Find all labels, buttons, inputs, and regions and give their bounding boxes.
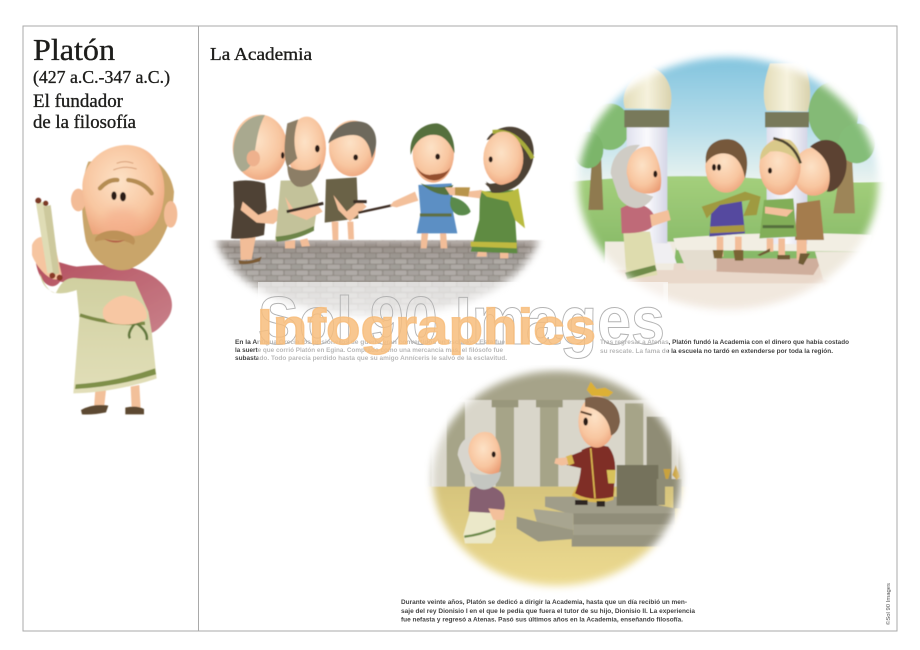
left column [624,67,677,263]
palace wall [428,366,686,487]
section heading: La Academia [210,44,312,64]
scene 2: founding of the Academy [570,50,890,320]
cobblestone floor [210,240,550,320]
student in green [757,138,801,259]
old Plato [611,145,671,280]
scene 1: Plato sold into slavery [210,115,550,320]
slave trader in blue [390,123,471,248]
slave 3 [325,120,393,240]
caption 2: Tras regresar a Atenas, Platón fundó la Academia con el dinero que había costado [600,340,849,346]
title: Platón: Platón [33,32,116,67]
copyright credit: ©Sol 90 Images [885,583,892,625]
sky [570,50,890,182]
caption 1 [235,340,507,362]
illustration: Plato portrait [32,145,177,414]
watermark: Infographics: Infographics [257,299,596,355]
sidebar title block [33,32,170,133]
subtitle line 2: de la filosofía [33,113,136,133]
caption 3: saje del rey Dionisio I en el que le pedía que fuera el tutor de su hijo, Dionisio II. La experiencia [401,609,696,615]
caption 3: fue nefasta y regresó a Atenas. Pasó sus últimos años en la Academia, enseñando filosofía. [401,618,683,624]
caption 1: subastado. Todo parecía perdido hasta que su amigo Anníceris le salvó de la esclavitud. [235,356,507,362]
right column [764,63,810,244]
grass [570,176,890,263]
palace columns [447,400,672,492]
caption 2: su rescate. La fama de la escuela no tardó en extenderse por toda la región. [600,349,833,355]
watermark fade panel [258,282,668,365]
caption 2 [600,340,849,355]
trees [573,82,875,213]
student in purple [702,139,761,261]
caption 1: la suerte que corrió Platón en Egina. Comprado como una mercancía más, el filósofo fue [235,348,504,354]
scene 3: Plato and Dionysius [425,365,690,595]
slave 1 [231,115,287,264]
watermark: Sol 90 Images outline: Sol 90 Images [258,283,665,359]
subtitle line 1: El fundador [33,92,123,112]
entablature [475,368,642,400]
throne and table [617,465,682,508]
old Plato facing king [458,432,505,543]
floor [614,263,830,297]
bench [605,233,872,280]
column divider [198,26,200,631]
king Dionysius [554,382,620,507]
student in brown [793,140,847,265]
caption 1: En la Antigua Grecia los prisioneros de guerra eran convertidos en esclavos. Esta fue [235,340,506,346]
slave 2 [275,117,326,248]
caption 3: Durante veinte años, Platón se dedicó a dirigir la Academia, hasta que un día recibió un men- [401,600,687,606]
dates: (427 a.C.-347 a.C.) [33,67,170,88]
caption 3 [401,600,696,624]
buyer in green [445,127,534,258]
steps [517,497,675,547]
golden floor [425,487,690,595]
